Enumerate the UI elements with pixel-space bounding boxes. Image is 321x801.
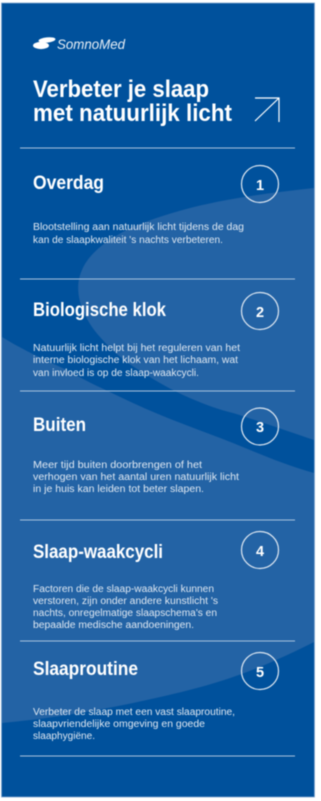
- number badge 3: 3: [256, 420, 264, 436]
- number badge 2: 2: [256, 305, 264, 321]
- section 5: Slaaproutine: [33, 652, 278, 742]
- number badge 4: [242, 532, 278, 568]
- body text 2: [33, 343, 240, 379]
- body text 1: kan de slaapkwaliteit 's nachts verbeteren.: [33, 235, 223, 246]
- body text 4: [33, 584, 218, 631]
- body text 3: in je huis kan leiden tot beter slapen.: [33, 484, 204, 495]
- section 4: Slaap-waakcycli: Slaap-waakcycli: [33, 542, 163, 563]
- body text 5: [33, 707, 235, 742]
- body text 2: interne biologische klok van het lichaam, wat: [33, 355, 238, 366]
- body text 5: slaaphygiëne.: [33, 731, 95, 742]
- logo: SomnoMed: SomnoMed: [57, 37, 125, 52]
- body text 4: Factoren die de slaap-waakcycli kunnen: [33, 584, 214, 595]
- section 1: Overdag: Overdag: [33, 173, 104, 194]
- number badge 1: 1: [256, 178, 264, 194]
- title: Verbeter je slaap: [33, 76, 209, 103]
- section 2: Biologische klok: [33, 292, 278, 379]
- number badge 2: [242, 292, 278, 330]
- number badge 4: 4: [256, 544, 264, 560]
- body text 2: van invloed is op de slaap-waakcycli.: [33, 368, 199, 379]
- body text 5: slaapvriendelijke omgeving en goede: [33, 719, 206, 730]
- number badge 3: [242, 408, 278, 445]
- body text 5: Verbeter de slaap met een vast slaaproutine,: [33, 707, 235, 718]
- body text 4: verstoren, zijn onder andere kunstlicht 's: [33, 596, 218, 607]
- body text 1: [33, 222, 244, 246]
- body text 3: Meer tijd buiten doorbrengen of het: [33, 460, 202, 471]
- title: [33, 76, 232, 127]
- number badge 1: [242, 166, 278, 202]
- title: met natuurlijk licht: [33, 100, 232, 127]
- number badge 5: 5: [256, 665, 264, 681]
- body text 4: bepaalde medische aandoeningen.: [33, 620, 194, 631]
- section 3: Buiten: Buiten: [33, 415, 86, 436]
- divider lines: [20, 148, 295, 756]
- section 2: Biologische klok: Biologische klok: [33, 300, 166, 321]
- body text 1: Blootstelling aan natuurlijk licht tijdens de dag: [33, 222, 244, 233]
- section 5: Slaaproutine: Slaaproutine: [33, 659, 138, 680]
- section 4: Slaap-waakcycli: [33, 532, 278, 631]
- number badge 5: [242, 652, 278, 690]
- body text 3: verhogen van het aantal uren natuurlijk licht: [33, 472, 239, 483]
- body text 4: nachts, onregelmatige slaapschema's en: [33, 608, 217, 619]
- icon: arrow pointing up right: [255, 98, 279, 122]
- section 1: Overdag: [33, 166, 278, 246]
- body text 3: [33, 460, 239, 495]
- body text 2: Natuurlijk licht helpt bij het reguleren van het: [33, 343, 240, 354]
- section 3: Buiten: [33, 408, 278, 495]
